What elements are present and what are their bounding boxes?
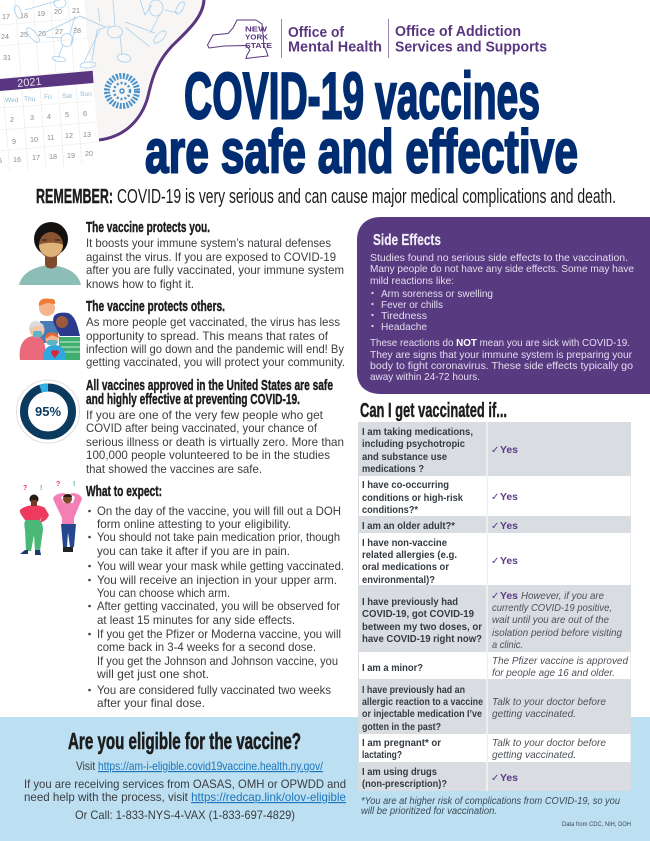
right column answers: ✓ (491, 492, 499, 503)
panel: side effects (357, 217, 650, 394)
header illustration: calendar and virus: 13 (83, 130, 91, 139)
text: all vaccines approved: 100,000 people volunteered to be in the studies (86, 449, 330, 462)
text: all vaccines approved: serious illness or death is virtually zero. More than (86, 436, 344, 449)
left column questions: related allergies (e.g. (362, 550, 457, 561)
left column questions: environmental)? (362, 575, 435, 586)
calendar top numbers: 17 (2, 12, 10, 21)
right column answers: getting vaccinated. (492, 750, 576, 761)
panel: side effects: away within 24-72 hours. (370, 372, 480, 383)
logo: New York State and offices: NEW (245, 24, 268, 34)
header illustration: calendar and virus: 4 (47, 112, 51, 121)
text: what to expect: You are considered fully vaccinated two weeks (97, 684, 331, 697)
header illustration: calendar and virus: 5 (65, 110, 69, 119)
text: what to expect (86, 483, 344, 710)
call to action: are you eligible: need help with the process, visit https://redcap.link/olov-eligible (24, 791, 346, 804)
header illustration: calendar and virus: Wed (5, 97, 19, 104)
left column questions: oral medications or (362, 562, 449, 573)
text: the vaccine protects others: opportunity to spread. This means that rates of (86, 330, 329, 343)
footnote: will be prioritized for vaccination. (361, 806, 497, 817)
calendar top numbers: 18 (20, 11, 28, 20)
right column answers: However, if you are (521, 591, 604, 602)
header illustration: calendar and virus: Sat (62, 93, 72, 100)
left column questions: gotten in the past? (362, 722, 441, 733)
right column answers: wait until you are out of the (492, 615, 609, 626)
left column questions: allergic reaction to a vaccine (362, 697, 483, 708)
call to action: are you eligible: If you are receiving services from OASAS, OMH or OPWDD and (24, 778, 346, 791)
blue footer band (0, 717, 650, 841)
header illustration: calendar and virus: 19 (67, 151, 75, 160)
text: what to expect: at least 15 minutes for any side effects. (97, 614, 295, 627)
text: all vaccines approved: All vaccines approved in the United States are safe (86, 377, 333, 394)
text: the vaccine protects others: getting vaccinated, you will protect your community. (86, 356, 345, 369)
right column answers: ✓ (491, 445, 499, 456)
text: what to expect: form online attesting to your eligibility. (97, 518, 291, 531)
calendar top numbers: 31 (3, 53, 11, 62)
text: the vaccine protects you: knows how to fight it. (86, 278, 194, 291)
text: what to expect: What to expect: (86, 483, 162, 500)
logo: New York State and offices: Office of (288, 25, 344, 41)
call to action: are you eligible: Or Call: 1-833-NYS-4-VAX (1-833-697-4829) (75, 809, 295, 822)
calendar top numbers: 26 (38, 29, 46, 38)
right column answers: ✓ (491, 773, 499, 784)
right column answers: Yes (500, 521, 518, 532)
panel: side effects: They are signs that your immune system is preparing your (370, 350, 633, 361)
header illustration: calendar and virus: 17 (32, 153, 40, 162)
panel: side effects: Studies found no serious side effects to the vaccination. (370, 253, 628, 264)
outline virus particles (13, 0, 186, 69)
left column questions: I am pregnant* or (362, 738, 441, 749)
calendar band 2021 (0, 71, 94, 91)
text: what to expect: You should not take pain medication prior, though (97, 531, 340, 544)
left column questions: between my two doses, or (362, 622, 482, 633)
text: what to expect: after your final dose. (97, 697, 205, 710)
header illustration: calendar and virus: 2021 (17, 76, 42, 90)
right column answers: getting vaccinated. (492, 709, 576, 720)
text: the vaccine protects you: against the virus. If you are exposed to COVID-19 (86, 251, 336, 264)
text: what to expect: will get just one shot. (96, 668, 209, 681)
right column answers: Yes (500, 773, 518, 784)
right column answers: Yes (500, 591, 518, 602)
footnote (361, 796, 620, 817)
logo: New York State and offices: Office of Addiction (395, 24, 521, 40)
right column answers: Talk to your doctor before (492, 697, 606, 708)
right column answers: for people age 16 and older. (492, 668, 615, 679)
left column questions: I am an older adult?* (362, 521, 456, 532)
calendar top numbers: 28 (73, 26, 81, 35)
call to action: are you eligible: Visit https://am-i-eligible.covid19vaccine.health.ny.gov/ (76, 760, 324, 773)
left column questions: medications ? (362, 464, 424, 475)
calendar top numbers (1, 6, 81, 62)
icon: two people wondering: ? (56, 481, 60, 488)
source note: Data from CDC, NIH, DOH (562, 822, 631, 828)
left column questions: I have previously had an (362, 685, 465, 696)
left column questions: I am a minor? (362, 663, 423, 674)
right column answers: Yes (500, 445, 518, 456)
header illustration: calendar and virus: 12 (65, 131, 73, 140)
right column answers (491, 445, 629, 784)
right column answers: Talk to your doctor before (492, 738, 606, 749)
text: all vaccines approved (86, 377, 344, 476)
logo: New York State and offices: Mental Health (288, 40, 382, 56)
left column questions: lactating? (362, 750, 402, 761)
text: the vaccine protects others: The vaccine protects others. (86, 298, 225, 315)
text: the vaccine protects you: after you are fully vaccinated, your immune system (86, 264, 344, 277)
table: can I get vaccinated (358, 422, 631, 791)
left column questions: have COVID-19 right now? (362, 634, 482, 645)
calendar top numbers: 19 (37, 9, 45, 18)
right column answers: currently COVID-19 positive, (492, 603, 612, 614)
text: the vaccine protects you (86, 219, 344, 291)
icon: two people wondering (20, 481, 82, 555)
header illustration: calendar and virus: 6 (83, 109, 87, 118)
remember statement: REMEMBER: (36, 186, 113, 208)
text: the vaccine protects you: It boosts your immune system’s natural defenses (86, 237, 331, 250)
header illustration: calendar and virus: 16 (13, 155, 21, 164)
icon: two people wondering: ? (23, 485, 27, 492)
left column questions: conditions?* (362, 505, 419, 516)
header illustration: calendar and virus: 18 (49, 152, 57, 161)
icon: New York State outline (208, 20, 268, 58)
solid virus (107, 76, 137, 106)
left column questions: including psychotropic (362, 439, 465, 450)
text: what to expect: You will wear your mask while getting vaccinated. (97, 560, 344, 573)
header illustration: calendar and virus (0, 0, 204, 172)
header illustration: calendar and virus: Fri (44, 94, 52, 101)
calendar top numbers: 21 (72, 6, 80, 15)
calendar top numbers: 25 (20, 30, 28, 39)
header illustration: calendar and virus: 2 (10, 115, 14, 124)
text: what to expect: You will receive an injection in your upper arm. (97, 574, 337, 587)
text: what to expect: After getting vaccinated, you will be observed for (97, 600, 340, 613)
left column questions: or injectable medication I’ve (362, 709, 482, 720)
panel: side effects: mild reactions like: (370, 276, 454, 287)
panel: side effects: Side Effects (373, 232, 441, 249)
calendar top numbers: 24 (1, 32, 9, 41)
chart: 95 percent donut: 95% (35, 404, 61, 419)
left column questions: I have non-vaccine (362, 538, 447, 549)
right column answers: ✓ (491, 556, 499, 567)
heading: can I get vaccinated: Can I get vaccinated if... (360, 400, 507, 422)
left column questions: and substance use (362, 452, 447, 463)
panel: side effects: body to fight coronavirus. These side effects typically go (370, 361, 633, 372)
text: what to expect: On the day of the vaccine, you will fill out a DOH (97, 505, 341, 518)
calendar top numbers: 20 (54, 7, 62, 16)
left column questions: I have previously had (362, 597, 458, 608)
right column answers: The Pfizer vaccine is approved (492, 656, 629, 667)
text: what to expect: you can take it after if you are in pain. (97, 545, 290, 558)
left column questions: I have co-occurring (362, 480, 449, 491)
panel: side effects: Arm soreness or swelling (381, 289, 493, 300)
chart: 95 percent donut (16, 380, 80, 443)
logo: New York State and offices (208, 19, 547, 58)
text: all vaccines approved: If you are one of the very few people who get (86, 409, 324, 422)
left column questions: I am taking medications, (362, 427, 473, 438)
right column answers: Yes (500, 492, 518, 503)
text: what to expect: If you get the Pfizer or Moderna vaccine, you will (97, 628, 341, 641)
text: the vaccine protects you: The vaccine protects you. (86, 219, 210, 236)
text: what to expect: If you get the Johnson and Johnson vaccine, you (97, 655, 338, 668)
text: all vaccines approved: that showed the vaccines are safe. (86, 463, 262, 476)
header illustration: calendar and virus: 20 (85, 149, 93, 158)
title (145, 58, 578, 186)
right column answers: isolation period before visiting (492, 628, 622, 639)
footnote: *You are at higher risk of complications from COVID-19, so you (361, 796, 620, 807)
text: all vaccines approved: and highly effective at preventing COVID-19. (86, 391, 300, 408)
text: all vaccines approved: COVID after being vaccinated, your chance of (86, 422, 318, 435)
left column questions: I am using drugs (362, 767, 437, 778)
right column answers: ✓ (491, 521, 499, 532)
header illustration: calendar and virus: Sun (80, 91, 92, 98)
call to action: are you eligible (24, 728, 346, 822)
left column questions (362, 427, 483, 790)
right column answers: Yes (500, 556, 518, 567)
header illustration: calendar and virus: 9 (12, 137, 16, 146)
header illustration: calendar and virus: 10 (30, 135, 38, 144)
call to action: are you eligible: Are you eligible for the vaccine? (68, 728, 301, 754)
text: the vaccine protects others: infection will go down and the pandemic will end! By (86, 343, 344, 356)
text: what to expect: You can choose which arm. (97, 587, 230, 600)
panel: side effects: Many people do not have any side effects. Some may have (370, 264, 634, 275)
panel: side effects: Fever or chills (381, 300, 443, 311)
header illustration: calendar and virus: 3 (30, 113, 34, 122)
text: what to expect: come back in 3-4 weeks for a second dose. (97, 641, 316, 654)
icon: two people wondering: ! (40, 485, 42, 492)
left column questions: conditions or high-risk (362, 493, 463, 504)
header illustration: calendar and virus: Thu (24, 96, 36, 103)
icon: masked person (19, 222, 81, 285)
text: the vaccine protects others: As more people get vaccinated, the virus has less (86, 316, 340, 329)
header illustration: calendar and virus: 11 (47, 133, 54, 142)
left column questions: (non-prescription)? (362, 779, 447, 790)
calendar top numbers: 27 (55, 27, 63, 36)
logo: New York State and offices: YORK (245, 32, 269, 42)
panel: side effects: These reactions do NOT mean you are sick with COVID-19. (370, 338, 630, 349)
logo: New York State and offices: Services and Supports (395, 40, 547, 56)
logo: New York State and offices: STATE (245, 41, 272, 50)
right column answers: ✓ (491, 591, 499, 602)
left column questions: COVID-19, got COVID-19 (362, 609, 474, 620)
right column answers: a clinic. (492, 640, 523, 651)
panel: side effects: Headache (381, 322, 427, 333)
icon: two people wondering: ! (73, 481, 75, 488)
panel: side effects: Tiredness (381, 311, 427, 322)
text: the vaccine protects others (86, 298, 345, 369)
icon: family in masks (20, 299, 80, 360)
